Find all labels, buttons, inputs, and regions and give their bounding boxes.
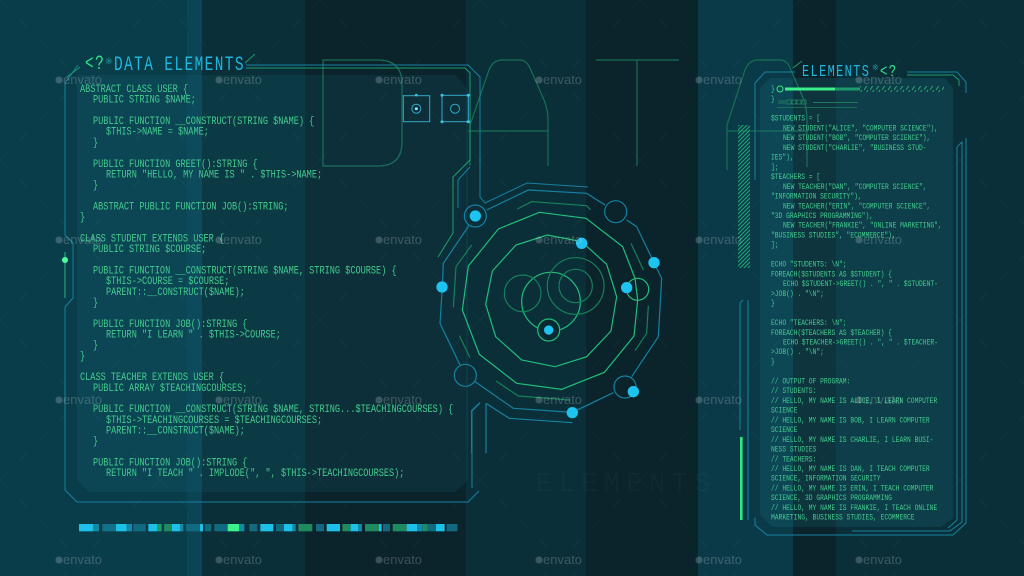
code block: program output: ECHO $STUDENT->GREET() . ", " . $STUDENT- xyxy=(783,280,938,289)
code block: program output: // HELLO, MY NAME IS FRANKIE, I TEACH ONLINE xyxy=(771,504,937,513)
circuit diagram: concentric rings xyxy=(436,190,662,453)
watermarks: envato xyxy=(543,552,582,567)
ghost word: DATA xyxy=(323,60,807,170)
code block: class definitions: PUBLIC STRING $NAME; xyxy=(93,94,196,106)
watermarks: envato xyxy=(223,552,262,567)
watermarks: envato xyxy=(63,392,102,407)
code block: class definitions: PUBLIC FUNCTION __CONSTRUCT(STRING $NAME) { xyxy=(93,115,314,127)
code block: program output: } xyxy=(771,96,775,105)
code block: class definitions: } xyxy=(93,179,98,191)
heading: elements: <? xyxy=(880,63,898,82)
code block: program output: "INFORMATION SECURITY"), xyxy=(771,193,862,202)
code block: class definitions: PUBLIC STRING $COURSE; xyxy=(93,243,206,255)
code block: program output: ]; xyxy=(771,242,779,251)
code block: program output: MARKETING, BUSINESS STUDIES, ECOMMERCE xyxy=(771,514,915,523)
code block: class definitions: ABSTRACT PUBLIC FUNCTION JOB():STRING; xyxy=(93,200,289,213)
watermarks: envato xyxy=(63,232,102,247)
code block: program output: FOREACH($STUDENTS AS $STUDENT) { xyxy=(771,271,892,280)
icon: square with corner nodes xyxy=(440,94,470,123)
data strip: segmented bar xyxy=(79,524,457,531)
panel fill xyxy=(760,78,953,527)
watermarks: envato xyxy=(703,232,742,247)
heading: data elements: ※ xyxy=(105,57,113,67)
code block: class definitions: ABSTRACT CLASS USER { xyxy=(80,83,188,95)
green accents xyxy=(793,61,959,86)
watermarks: envato xyxy=(863,232,902,247)
watermarks: envato xyxy=(863,72,902,87)
code block: class definitions: } xyxy=(93,339,98,352)
code block: program output: NEW TEACHER("DAN", "COMPUTER SCIENCE", xyxy=(783,183,927,192)
watermarks: envato xyxy=(703,72,742,87)
dim green arcs and circles xyxy=(453,202,648,400)
heading: data elements: <? xyxy=(85,53,105,76)
heading: elements: ※ xyxy=(872,63,879,72)
code block: program output: NEW STUDENT("BOB", "COMPUTER SCIENCE"), xyxy=(783,135,930,144)
watermarks: envato xyxy=(383,392,422,407)
panel frame xyxy=(65,65,588,502)
code block: program output: // HELLO, MY NAME IS DAN, I TEACH COMPUTER xyxy=(771,465,930,474)
code block: class definitions: } xyxy=(80,211,85,223)
cyan nodes xyxy=(436,210,660,418)
code block: class definitions: } xyxy=(93,136,98,149)
watermarks: envato xyxy=(383,232,422,247)
code block: program output: // OUTPUT OF PROGRAM: xyxy=(771,378,850,387)
code block: program output: } xyxy=(771,300,775,309)
code block: program output: NESS STUDIES xyxy=(771,446,817,455)
code block: class definitions: PUBLIC ARRAY $TEACHINGCOURSES; xyxy=(93,382,247,394)
code block: program output: $STUDENTS = [ xyxy=(771,115,820,124)
code block: program output: NEW TEACHER("ERIN", "COMPUTER SCIENCE", xyxy=(783,203,930,212)
code block: program output: SCIENCE, INFORMATION SECURITY xyxy=(771,475,881,484)
code block: program output: NEW STUDENT("CHARLIE", "BUSINESS STUD- xyxy=(783,144,927,153)
code block: class definitions: } xyxy=(93,435,98,448)
code block: program output: // HELLO, MY NAME IS ALICE, I LEARN COMPUTER xyxy=(771,397,938,406)
code block: class definitions: } xyxy=(93,297,98,309)
green level bar xyxy=(740,437,743,520)
code block: program output: NEW STUDENT("ALICE", "COMPUTER SCIENCE"), xyxy=(783,125,938,134)
green rings xyxy=(462,212,649,389)
watermarks: envato xyxy=(863,392,902,407)
watermarks: envato xyxy=(543,232,582,247)
watermarks: envato xyxy=(223,392,262,407)
code block: program output: >JOB() . "\N"; xyxy=(771,290,824,299)
code block: class definitions: PARENT::__CONSTRUCT($NAME); xyxy=(106,425,245,437)
code block: class definitions: PUBLIC FUNCTION __CONSTRUCT(STRING $NAME, STRING $COURSE) { xyxy=(93,265,397,277)
watermarks: envato xyxy=(543,392,582,407)
code block: class definitions: PUBLIC FUNCTION __CONSTRUCT(STRING $NAME, STRING...$TEACHINGCOURSES) { xyxy=(93,403,453,416)
code block: program output: ECHO $TEACHER->GREET() . ", " . $TEACHER- xyxy=(783,339,938,348)
watermarks: envato xyxy=(383,72,422,87)
code block: program output: ECHO "STUDENTS: \N"; xyxy=(771,261,847,270)
code block: class definitions: RETURN "HELLO, MY NAME IS " . $THIS->NAME; xyxy=(106,168,322,181)
watermarks: envato xyxy=(703,392,742,407)
code block: class definitions: PARENT::__CONSTRUCT($NAME); xyxy=(106,286,245,298)
code block: class definitions: RETURN "I TEACH " . IMPLODE(", ", $THIS->TEACHINGCOURSES); xyxy=(106,467,404,480)
code block: program output: // HELLO, MY NAME IS BOB, I LEARN COMPUTER xyxy=(771,417,930,426)
watermarks: envato xyxy=(63,552,102,567)
code block: program output: // TEACHERS: xyxy=(771,456,816,465)
code block: program output: // HELLO, MY NAME IS CHARLIE, I LEARN BUSI- xyxy=(771,436,933,445)
code block: program output: FOREACH($TEACHERS AS $TEACHER) { xyxy=(771,329,892,338)
heading: elements: ELEMENTS xyxy=(802,63,870,82)
code block: program output: "BUSINESS STUDIES", "ECOMMERCE"), xyxy=(771,232,896,241)
progress indicators xyxy=(777,86,944,108)
code block: class definitions: PUBLIC FUNCTION JOB():STRING { xyxy=(93,318,247,330)
watermarks xyxy=(55,72,902,567)
icon: square with target xyxy=(403,94,430,122)
watermarks: envato xyxy=(223,72,262,87)
code block: program output: ]; xyxy=(771,164,779,173)
marker dot xyxy=(62,257,68,263)
code block: class definitions: $THIS->COURSE = $COURSE; xyxy=(106,275,229,288)
code block: class definitions: RETURN "I LEARN " . $THIS->COURSE; xyxy=(106,329,281,341)
code block: program output: NEW TEACHER("FRANKIE", "ONLINE MARKETING", xyxy=(783,222,942,231)
outer blue ring xyxy=(440,190,662,453)
code block: class definitions: CLASS TEACHER EXTENDS USER { xyxy=(80,371,224,384)
code block: class definitions: PUBLIC FUNCTION GREET():STRING { xyxy=(93,158,258,170)
panel frame xyxy=(740,72,966,535)
code block: class definitions xyxy=(80,83,453,480)
code block: program output: SCIENCE xyxy=(771,407,797,416)
code block: program output: SCIENCE xyxy=(771,426,797,435)
code block: program output: IES"), xyxy=(771,154,794,163)
code block: class definitions: } xyxy=(80,350,85,362)
code block: program output: SCIENCE, 3D GRAPHICS PROGRAMMING xyxy=(771,495,892,504)
code block: program output: } xyxy=(771,358,775,367)
code block: program output: // STUDENTS: xyxy=(771,387,816,396)
watermarks: envato xyxy=(63,72,102,87)
code block: program output: "3D GRAPHICS PROGRAMMING"), xyxy=(771,212,873,221)
panel fill xyxy=(77,75,468,492)
watermarks: envato xyxy=(863,552,902,567)
code block: program output: >JOB() . "\N"; xyxy=(771,349,824,358)
code block: program output: $TEACHERS = [ xyxy=(771,173,820,182)
code block: class definitions: PUBLIC FUNCTION JOB():STRING { xyxy=(93,457,247,469)
code block: class definitions: CLASS STUDENT EXTENDS USER { xyxy=(80,233,224,245)
watermarks: envato xyxy=(543,72,582,87)
panel: left code panel xyxy=(62,53,588,502)
watermarks: envato xyxy=(383,552,422,567)
ghost word: ELEMENTS: ELEMENTS xyxy=(536,470,717,500)
code block: program output: // HELLO, MY NAME IS ERIN, I TEACH COMPUTER xyxy=(771,485,934,494)
code block: program output: ECHO "TEACHERS: \N"; xyxy=(771,319,847,328)
hatched strip xyxy=(738,125,750,268)
panel: right code panel xyxy=(738,61,966,535)
watermarks: envato xyxy=(223,232,262,247)
watermarks: envato xyxy=(703,552,742,567)
code block: program output: } xyxy=(771,86,775,95)
code block: class definitions: $THIS->NAME = $NAME; xyxy=(106,126,209,138)
heading: data elements: DATA ELEMENTS xyxy=(114,54,245,77)
code block: program output xyxy=(771,86,942,523)
code block: class definitions: $THIS->TEACHINGCOURSES = $TEACHINGCOURSES; xyxy=(106,414,322,426)
